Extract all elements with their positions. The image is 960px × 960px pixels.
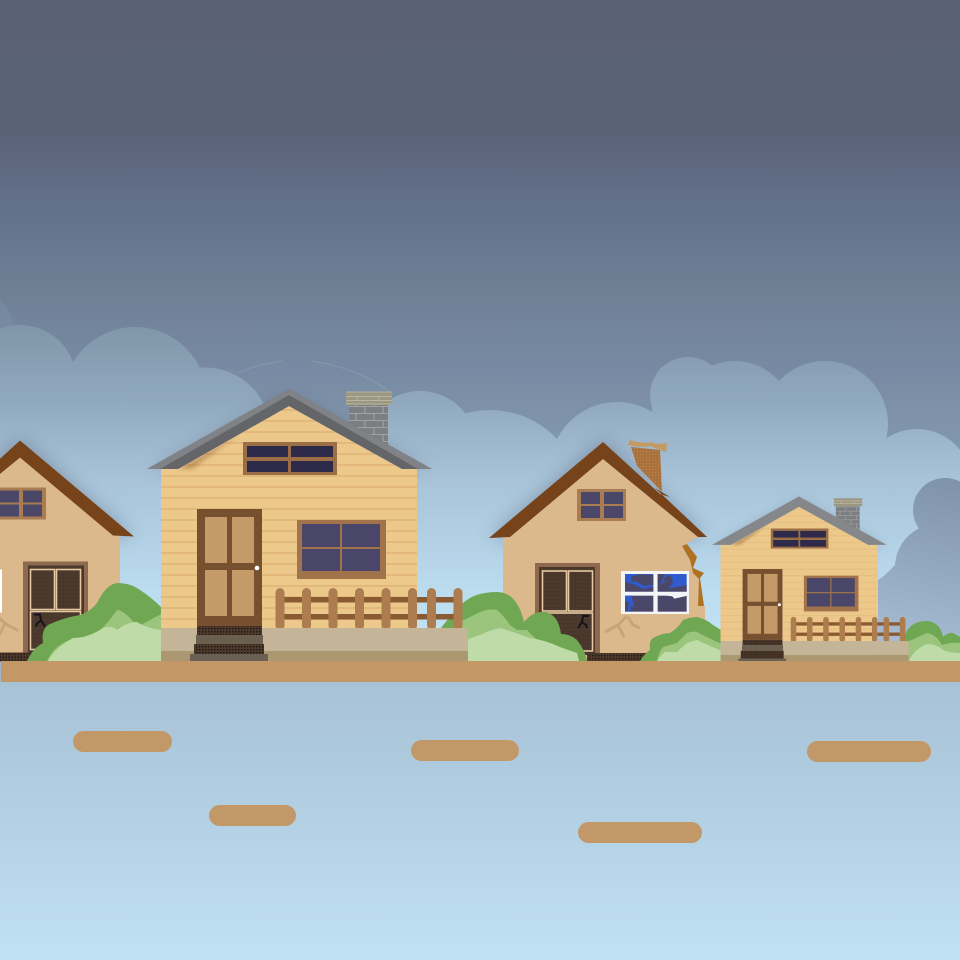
door bbox=[535, 563, 600, 655]
roof bbox=[712, 496, 887, 545]
broken chimney bbox=[631, 447, 662, 492]
attic window bbox=[0, 488, 46, 520]
door bbox=[197, 509, 262, 626]
attic window bbox=[243, 442, 337, 475]
window bbox=[0, 570, 2, 612]
floating debris planks bbox=[73, 731, 931, 843]
wall bbox=[0, 458, 120, 662]
roof eave shadow bbox=[731, 524, 769, 545]
wall crack in siding bbox=[682, 544, 704, 606]
sky background bbox=[0, 0, 960, 682]
roof highlight bbox=[147, 389, 432, 469]
roof shadow bbox=[489, 442, 707, 538]
house 2: large intact house bbox=[147, 389, 468, 661]
window bbox=[297, 520, 386, 579]
wall siding bbox=[721, 507, 877, 641]
bush 4 bbox=[893, 621, 960, 661]
bush 3 bbox=[640, 617, 724, 661]
door bbox=[743, 569, 782, 640]
house 1: cracked house, left edge bbox=[0, 440, 134, 662]
wall crack bbox=[0, 614, 18, 636]
front steps bbox=[738, 640, 786, 661]
step bbox=[587, 653, 647, 661]
fence bbox=[276, 588, 462, 630]
wall siding bbox=[161, 406, 417, 628]
chimney bbox=[346, 392, 392, 453]
broken window bbox=[621, 571, 689, 614]
wall bbox=[503, 459, 705, 661]
faint wind arcs bbox=[237, 361, 390, 392]
roof bbox=[147, 389, 432, 469]
house 4: small intact house bbox=[712, 496, 909, 661]
roof eave shadow bbox=[178, 434, 240, 469]
flood water bbox=[0, 682, 960, 960]
door bbox=[23, 562, 88, 656]
bush 1 bbox=[27, 583, 165, 661]
roof shadow bbox=[714, 500, 885, 545]
roof shadow bbox=[0, 440, 134, 536]
bush 2 bbox=[441, 592, 587, 661]
chimney cap bbox=[628, 440, 667, 452]
wall crack bbox=[605, 616, 640, 637]
house 3: damaged house bbox=[489, 440, 707, 661]
front steps bbox=[190, 626, 268, 661]
dark cloud on the right bbox=[878, 478, 960, 661]
chimney bbox=[834, 498, 862, 535]
far cloud edge bbox=[0, 287, 13, 373]
roof bbox=[0, 440, 134, 536]
ground strip bbox=[1, 661, 960, 682]
attic window bbox=[577, 489, 626, 521]
roof shadow bbox=[150, 395, 430, 470]
fence bbox=[791, 617, 905, 642]
step bbox=[0, 652, 36, 662]
foundation bbox=[721, 641, 909, 661]
attic window bbox=[771, 529, 828, 548]
roof bbox=[489, 442, 707, 538]
foundation bbox=[161, 628, 468, 661]
storm clouds bbox=[0, 325, 960, 661]
window bbox=[804, 576, 858, 611]
